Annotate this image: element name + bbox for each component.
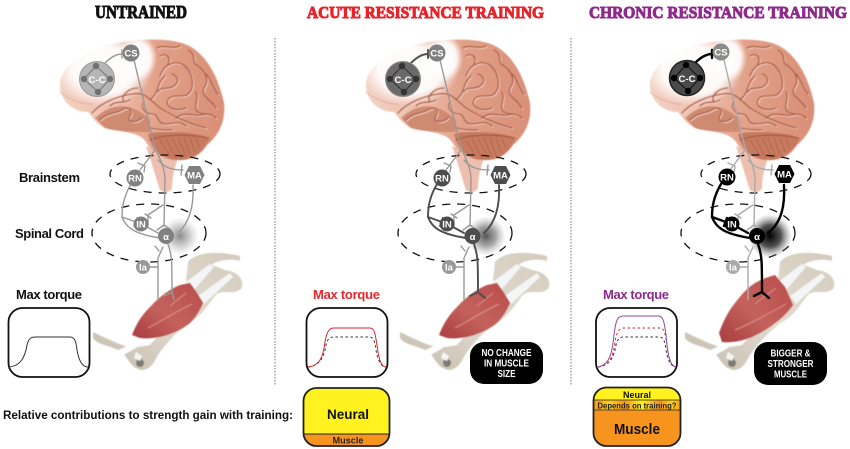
- node: IN: [440, 216, 454, 232]
- node: IN: [134, 216, 148, 232]
- label: brainstem: Brainstem: [19, 170, 80, 185]
- node: RN: RN: [128, 174, 142, 184]
- node: alpha: α: [470, 232, 476, 243]
- node: IN: IN: [442, 220, 452, 230]
- illustration: enlarged biceps muscle: [719, 275, 793, 342]
- node: MA: MA: [777, 170, 792, 180]
- illustration: brain: [646, 34, 814, 192]
- illustration: brain: [56, 34, 224, 192]
- spinal cord region: [398, 204, 512, 262]
- node: CS: CS: [714, 48, 728, 58]
- node: C-C circuit: C-C: [395, 75, 412, 86]
- brainstem region: [701, 155, 811, 193]
- node: RN: [718, 168, 736, 186]
- callout: no change in muscle size: NO CHANGE: [482, 347, 532, 359]
- callout: bigger and stronger muscle: BIGGER &: [770, 348, 811, 360]
- node: MA: MA: [187, 170, 202, 182]
- heading: max torque: Max torque: [313, 287, 380, 302]
- node: Ia: [136, 260, 150, 274]
- illustration: brain: [362, 34, 530, 192]
- node: RN: RN: [435, 174, 449, 184]
- illustration: arm bones: [93, 253, 242, 370]
- node: IN: [724, 216, 740, 232]
- illustration: arm bones: [685, 253, 834, 370]
- heading: max torque: Max torque: [603, 287, 669, 302]
- node: IN: IN: [136, 220, 146, 230]
- spinal cord region: [681, 204, 795, 262]
- node: alpha: α: [163, 232, 169, 243]
- node: C-C circuit: [386, 62, 420, 96]
- node: Ia: Ia: [445, 262, 454, 274]
- neural pathways: [411, 50, 499, 300]
- node: MA: [490, 166, 510, 184]
- chart: untrained torque curve: [8, 308, 90, 377]
- node: RN: [126, 170, 144, 186]
- motor neuron glow: [161, 217, 199, 255]
- bar: chronic contributions: Neural: [623, 390, 651, 400]
- node: RN: [434, 170, 450, 186]
- node: Ia: Ia: [729, 262, 738, 274]
- node: CS: [428, 44, 446, 62]
- node: C-C circuit: [80, 62, 114, 96]
- illustration: biceps muscle: [439, 283, 510, 338]
- node: Ia: [726, 260, 740, 274]
- neural pathways: [105, 50, 193, 300]
- node: IN: IN: [727, 220, 737, 230]
- node: C-C circuit: C-C: [89, 75, 106, 86]
- heading: max torque: Max torque: [16, 287, 82, 302]
- illustration: biceps muscle: [132, 283, 203, 338]
- callout: bigger and stronger muscle: MUSCLE: [774, 368, 807, 380]
- node: CS: CS: [124, 48, 138, 60]
- bar: chronic contributions: Depends on training?: [598, 400, 676, 410]
- callout: no change in muscle size: IN MUSCLE: [484, 358, 529, 370]
- bar: acute contributions: [303, 388, 390, 446]
- illustration: arm bones: [400, 253, 549, 370]
- node: MA: [184, 166, 204, 184]
- callout: bigger and stronger muscle: [754, 342, 827, 385]
- node: RN: RN: [720, 172, 734, 184]
- bar: acute contributions: Muscle: [332, 436, 364, 446]
- title: untrained: UNTRAINED: [95, 2, 187, 22]
- node: MA: MA: [493, 170, 508, 182]
- motor neuron glow: [466, 216, 506, 256]
- text: relative contributions: Relative contributions to strength gain with training:: [3, 408, 293, 422]
- chart: acute torque curves: [306, 308, 388, 377]
- motor neuron glow: [748, 214, 792, 258]
- node: alpha: α: [754, 232, 760, 243]
- node: Ia: [442, 260, 456, 274]
- bar: chronic contributions: [593, 387, 681, 446]
- label: spinal cord: Spinal Cord: [15, 226, 84, 241]
- node: C-C circuit: C-C: [679, 74, 696, 85]
- callout: no change in muscle size: SIZE: [498, 368, 516, 380]
- neural pathways: [695, 50, 784, 300]
- node: Ia: Ia: [139, 262, 148, 274]
- bar: chronic contributions: Muscle: [614, 421, 660, 438]
- callout: bigger and stronger muscle: STRONGER: [768, 358, 814, 370]
- node: CS: [122, 44, 140, 62]
- node: MA: [774, 165, 794, 183]
- callout: no change in muscle size: [470, 342, 543, 384]
- title: acute resistance training: ACUTE RESISTANCE TRAINING: [307, 3, 544, 22]
- node: alpha: [464, 228, 480, 244]
- panel: untrained: [8, 34, 242, 377]
- panel: acute resistance training: [306, 34, 549, 384]
- spinal cord region: [92, 204, 206, 262]
- node: alpha: [158, 228, 174, 244]
- node: alpha: [749, 228, 765, 244]
- node: CS: CS: [430, 48, 444, 60]
- node: CS: [712, 44, 730, 60]
- brainstem region: [416, 155, 526, 193]
- bar: acute contributions: Neural: [327, 406, 369, 422]
- chart: chronic torque curves: [596, 308, 677, 377]
- brainstem region: [110, 155, 220, 193]
- panel: chronic resistance training: [596, 34, 834, 385]
- node: C-C circuit: [670, 60, 704, 96]
